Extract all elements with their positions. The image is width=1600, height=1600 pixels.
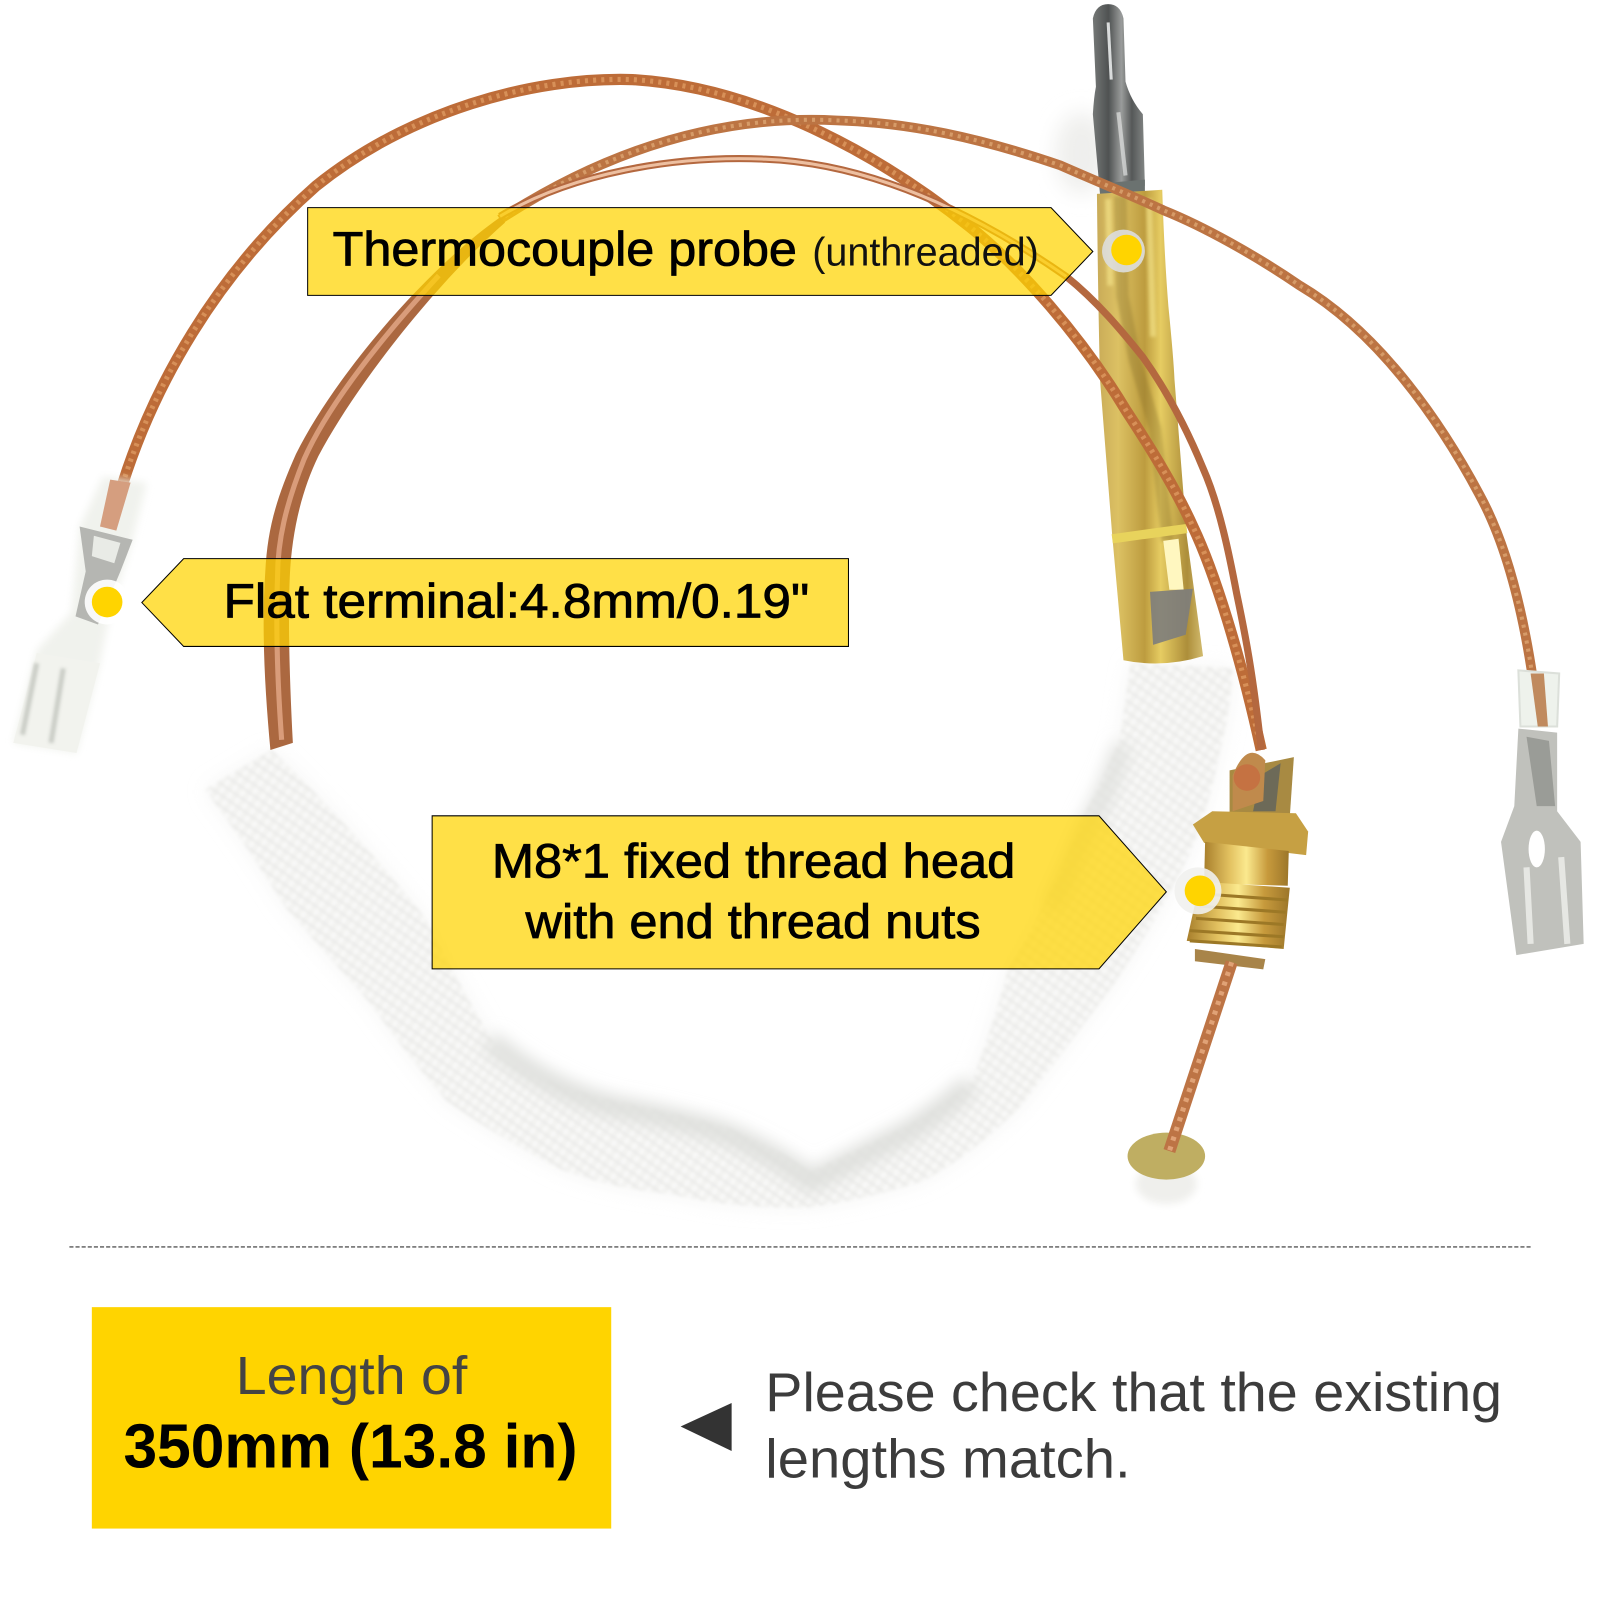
right flat terminal	[1501, 670, 1584, 955]
threaded brass fitting	[1187, 753, 1308, 969]
length panel	[92, 1307, 611, 1529]
note text: lengths match.	[765, 1428, 1131, 1490]
copper wire: right terminal over to sleeve	[264, 120, 1539, 750]
callout: fixed thread head: with end thread nuts	[524, 896, 981, 949]
note text	[765, 1361, 1502, 1490]
arrow: pointing to length panel	[681, 1403, 732, 1451]
marker dot: thread head	[1174, 867, 1221, 914]
callout: flat terminal	[142, 559, 848, 646]
length panel: 350mm (13.8 in)	[123, 1412, 578, 1481]
note text: Please check that the existing	[765, 1361, 1502, 1423]
copper wire: left terminal to fitting	[122, 79, 1261, 750]
left flat terminal	[13, 477, 147, 753]
callout: fixed thread head: M8*1 fixed thread head	[492, 836, 1015, 889]
thin copper wire	[500, 159, 1261, 750]
probe: gold tube	[1097, 190, 1203, 663]
callout: flat terminal: Flat terminal:4.8mm/0.19"	[223, 575, 809, 628]
marker dot: terminal	[85, 580, 130, 624]
marker dot: probe	[1102, 230, 1145, 272]
length panel: Length of	[236, 1346, 468, 1406]
product photo: thermocouple	[13, 4, 1584, 1207]
callout: thermocouple probe: (unthreaded)	[812, 230, 1039, 274]
probe: grey tip	[1055, 4, 1145, 196]
callout: thermocouple probe: Thermocouple probe	[333, 223, 797, 276]
lower copper wire and end cap	[1128, 962, 1232, 1204]
callout: fixed thread head	[432, 816, 1166, 969]
white braided sleeve	[205, 663, 1233, 1207]
callout: thermocouple probe	[308, 208, 1093, 295]
